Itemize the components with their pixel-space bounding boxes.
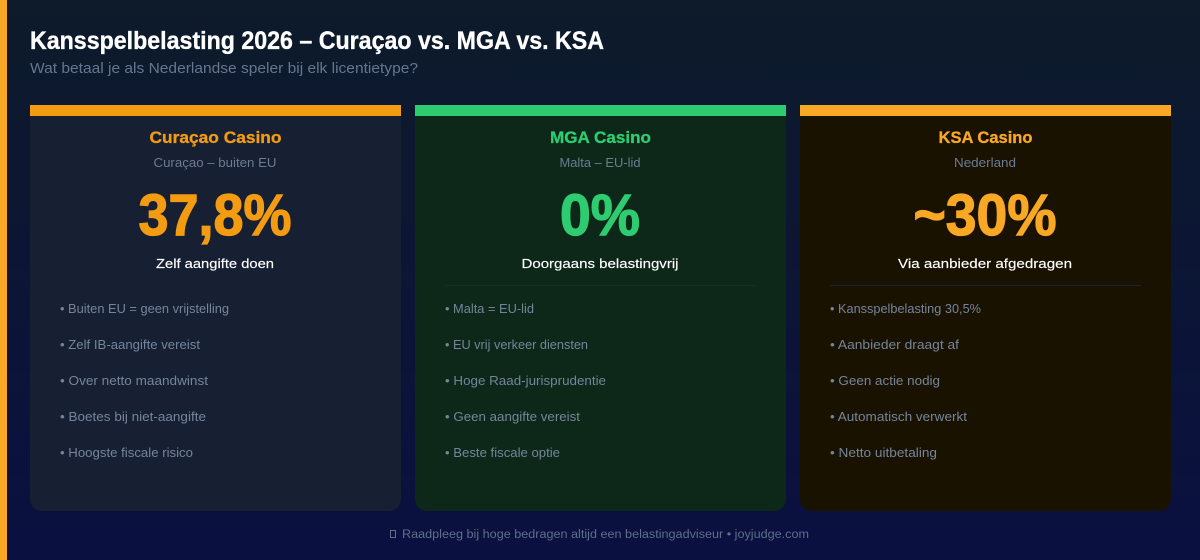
divider <box>830 285 1141 286</box>
bullet list: • Automatisch verwerkt <box>830 410 968 424</box>
subtitle: Wat betaal je als Nederlandse speler bij elk licentietype? <box>30 61 418 77</box>
card background <box>800 105 1171 511</box>
card background <box>415 105 786 511</box>
card subheading: Curaçao – buiten EU <box>154 156 276 170</box>
bullet list: • Boetes bij niet-aangifte <box>60 410 206 424</box>
card heading: Curaçao Casino <box>150 128 282 147</box>
bullet list: • Geen aangifte vereist <box>445 410 581 424</box>
tax rate: ~30% <box>914 183 1056 248</box>
card accent bar <box>415 105 786 116</box>
card accent bar <box>30 105 401 116</box>
bullet list: • Zelf IB-aangifte vereist <box>60 338 201 352</box>
tax note: Doorgaans belastingvrij <box>522 256 679 271</box>
bullet list: • Geen actie nodig <box>830 374 940 388</box>
tax note: Zelf aangifte doen <box>156 256 274 271</box>
bullet list: • Kansspelbelasting 30,5% <box>830 302 981 316</box>
bullet list: • Aanbieder draagt af <box>830 338 960 352</box>
card accent bar <box>800 105 1171 116</box>
bullet list: • EU vrij verkeer diensten <box>445 338 588 352</box>
tax note: Via aanbieder afgedragen <box>898 256 1072 271</box>
footer note: Raadpleeg bij hoge bedragen altijd een belastingadviseur • joyjudge.com <box>402 529 809 541</box>
panel: KSA Casino <box>800 105 1171 511</box>
bullet list <box>60 302 229 460</box>
bullet list: • Buiten EU = geen vrijstelling <box>60 302 229 316</box>
card subheading: Nederland <box>954 156 1016 170</box>
card background <box>30 105 401 511</box>
bullet list: • Beste fiscale optie <box>445 446 560 460</box>
divider <box>445 285 756 286</box>
panel: MGA Casino <box>415 105 786 511</box>
card heading: MGA Casino <box>550 128 651 147</box>
card subheading: Malta – EU-lid <box>560 156 641 170</box>
icon: missing glyph box <box>390 530 396 538</box>
title: Kansspelbelasting 2026 – Curaçao vs. MGA vs. KSA <box>30 27 604 55</box>
bullet list: • Malta = EU-lid <box>445 302 534 316</box>
panel: Curaçao Casino <box>30 105 401 511</box>
bullet list: • Netto uitbetaling <box>830 446 937 460</box>
bullet list <box>830 302 981 460</box>
tax rate: 37,8% <box>138 183 292 248</box>
card heading: KSA Casino <box>938 128 1032 147</box>
bullet list: • Over netto maandwinst <box>60 374 209 388</box>
bullet list: • Hoogste fiscale risico <box>60 446 193 460</box>
bullet list: • Hoge Raad-jurisprudentie <box>445 374 606 388</box>
bullet list <box>445 302 606 460</box>
tax rate: 0% <box>560 183 640 248</box>
left accent bar <box>0 0 7 560</box>
